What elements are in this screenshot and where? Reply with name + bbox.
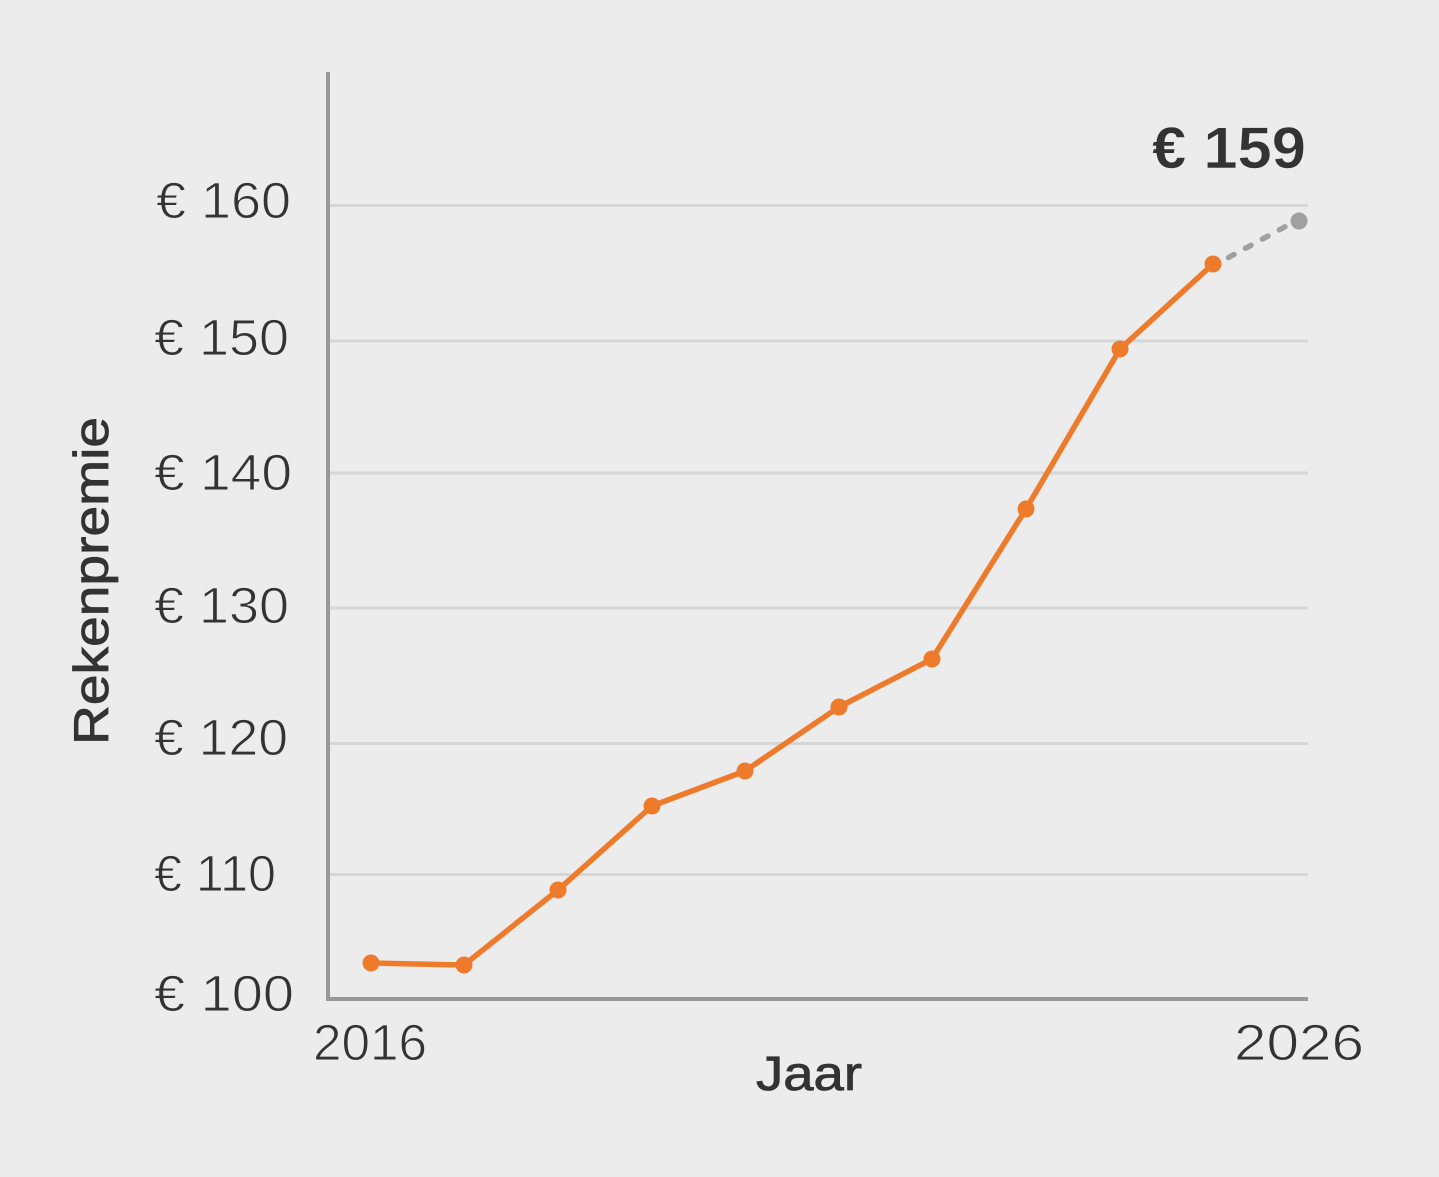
y-axis tick labels [154, 172, 294, 1022]
y-axis tick labels: € 130 [154, 577, 289, 634]
x-axis tick labels: 2026 [1234, 1014, 1364, 1071]
forecast dashed segment [1228, 212, 1308, 258]
forecast value callout: € 159 [1152, 116, 1306, 181]
y-axis title: Rekenpremie [65, 417, 119, 745]
orange data line [362, 256, 1222, 974]
x-axis title: Jaar [756, 1048, 862, 1101]
x-axis tick labels [313, 1014, 1364, 1071]
y-axis tick labels: € 100 [154, 965, 294, 1022]
x-axis tick labels: 2016 [313, 1014, 427, 1071]
y-axis tick labels: € 140 [154, 444, 292, 501]
y-axis tick labels: € 160 [156, 172, 291, 229]
y-axis tick labels: € 150 [154, 309, 289, 366]
y-axis tick labels: € 110 [154, 845, 276, 902]
y-axis tick labels: € 120 [154, 709, 288, 766]
axes [326, 72, 1308, 1001]
